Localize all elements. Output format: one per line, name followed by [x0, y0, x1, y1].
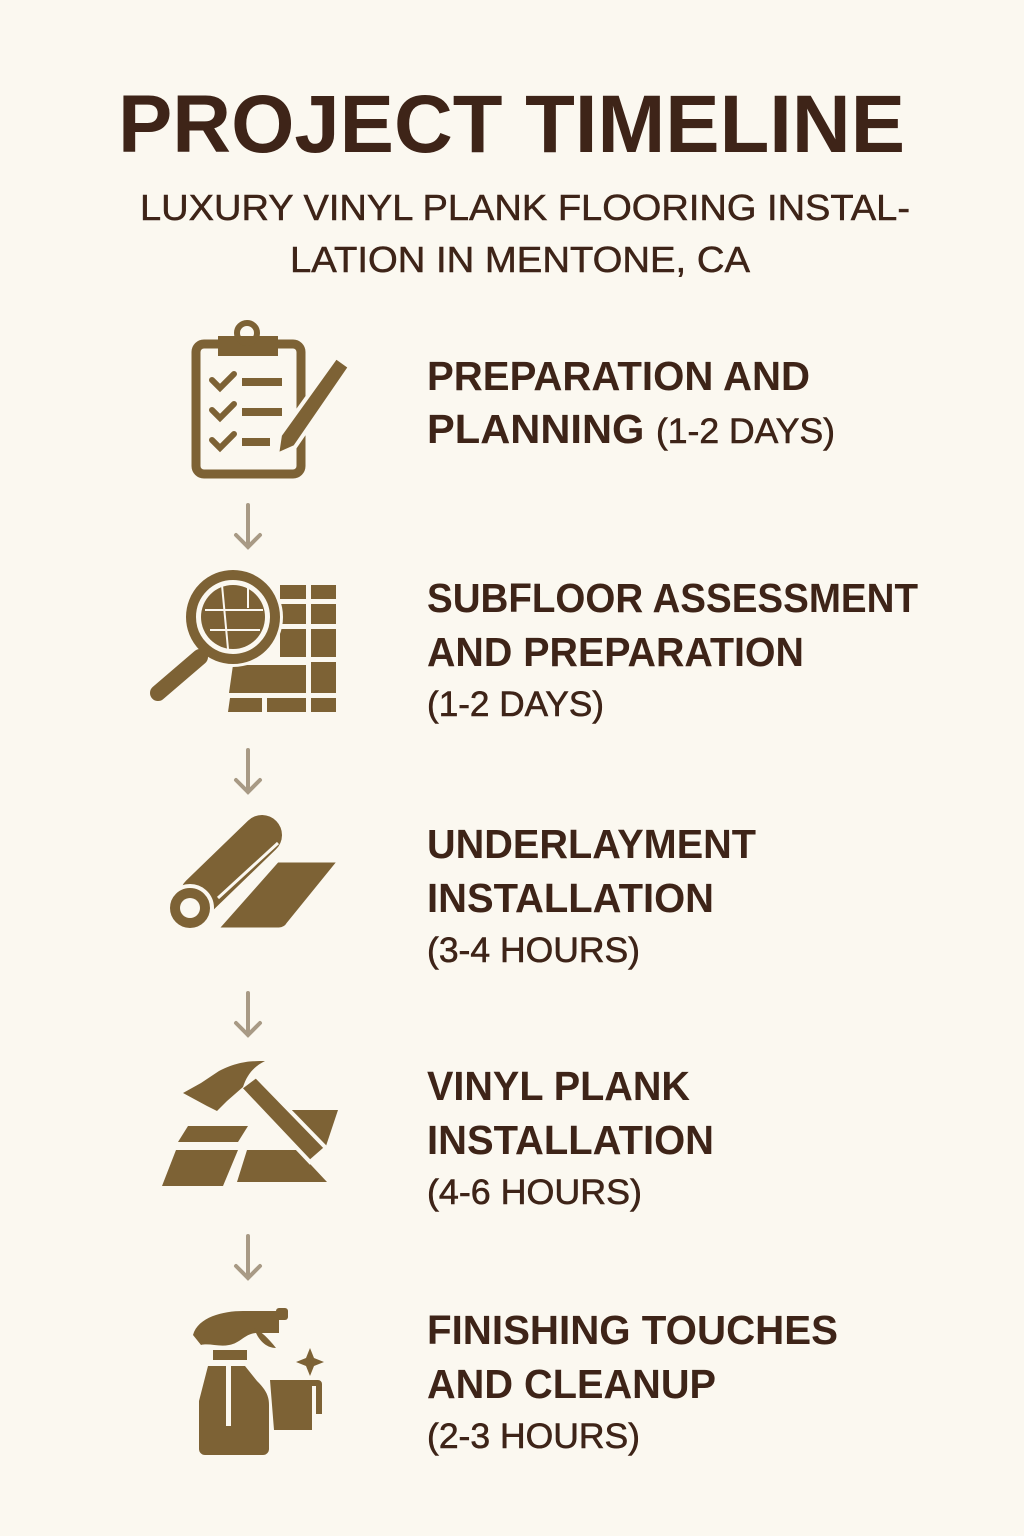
icon: spray bottle and bucket — [193, 1308, 324, 1455]
subtitle: LATION IN MENTONE, CA — [290, 239, 750, 280]
title: PROJECT TIMELINE — [118, 79, 905, 170]
step 1 text — [427, 353, 835, 452]
step 1 text: PREPARATION AND — [427, 353, 810, 399]
step 5 text: (2-3 HOURS) — [427, 1417, 640, 1456]
arrow 4 — [236, 1236, 260, 1278]
step 1 text: PLANNING (1-2 DAYS) — [427, 406, 835, 452]
step 3 text: (3-4 HOURS) — [427, 931, 640, 970]
step 2 text: AND PREPARATION — [427, 629, 804, 675]
step 4 text — [427, 1063, 714, 1212]
icon: clipboard — [196, 323, 350, 474]
step 3 text: UNDERLAYMENT — [427, 821, 756, 867]
arrow 2 — [236, 750, 260, 792]
step 3 text — [427, 821, 756, 970]
step 5 text: AND CLEANUP — [427, 1361, 716, 1407]
subtitle: LUXURY VINYL PLANK FLOORING INSTAL- — [140, 187, 910, 228]
icon: underlayment roll — [168, 835, 341, 930]
icon: hammer and planks — [162, 1061, 338, 1186]
step 3 text: INSTALLATION — [427, 875, 714, 921]
arrow 1 — [236, 505, 260, 547]
step 4 text: INSTALLATION — [427, 1117, 714, 1163]
step 5 text: FINISHING TOUCHES — [427, 1307, 838, 1353]
icon: magnifier over tiles — [158, 567, 336, 712]
subtitle — [140, 187, 910, 280]
step 2 text: SUBFLOOR ASSESSMENT — [427, 575, 918, 621]
step 4 text: VINYL PLANK — [427, 1063, 690, 1109]
arrow 3 — [236, 993, 260, 1035]
step 5 text — [427, 1307, 838, 1456]
step 2 text: (1-2 DAYS) — [427, 685, 604, 724]
step 2 text — [427, 575, 918, 724]
step 4 text: (4-6 HOURS) — [427, 1173, 642, 1212]
